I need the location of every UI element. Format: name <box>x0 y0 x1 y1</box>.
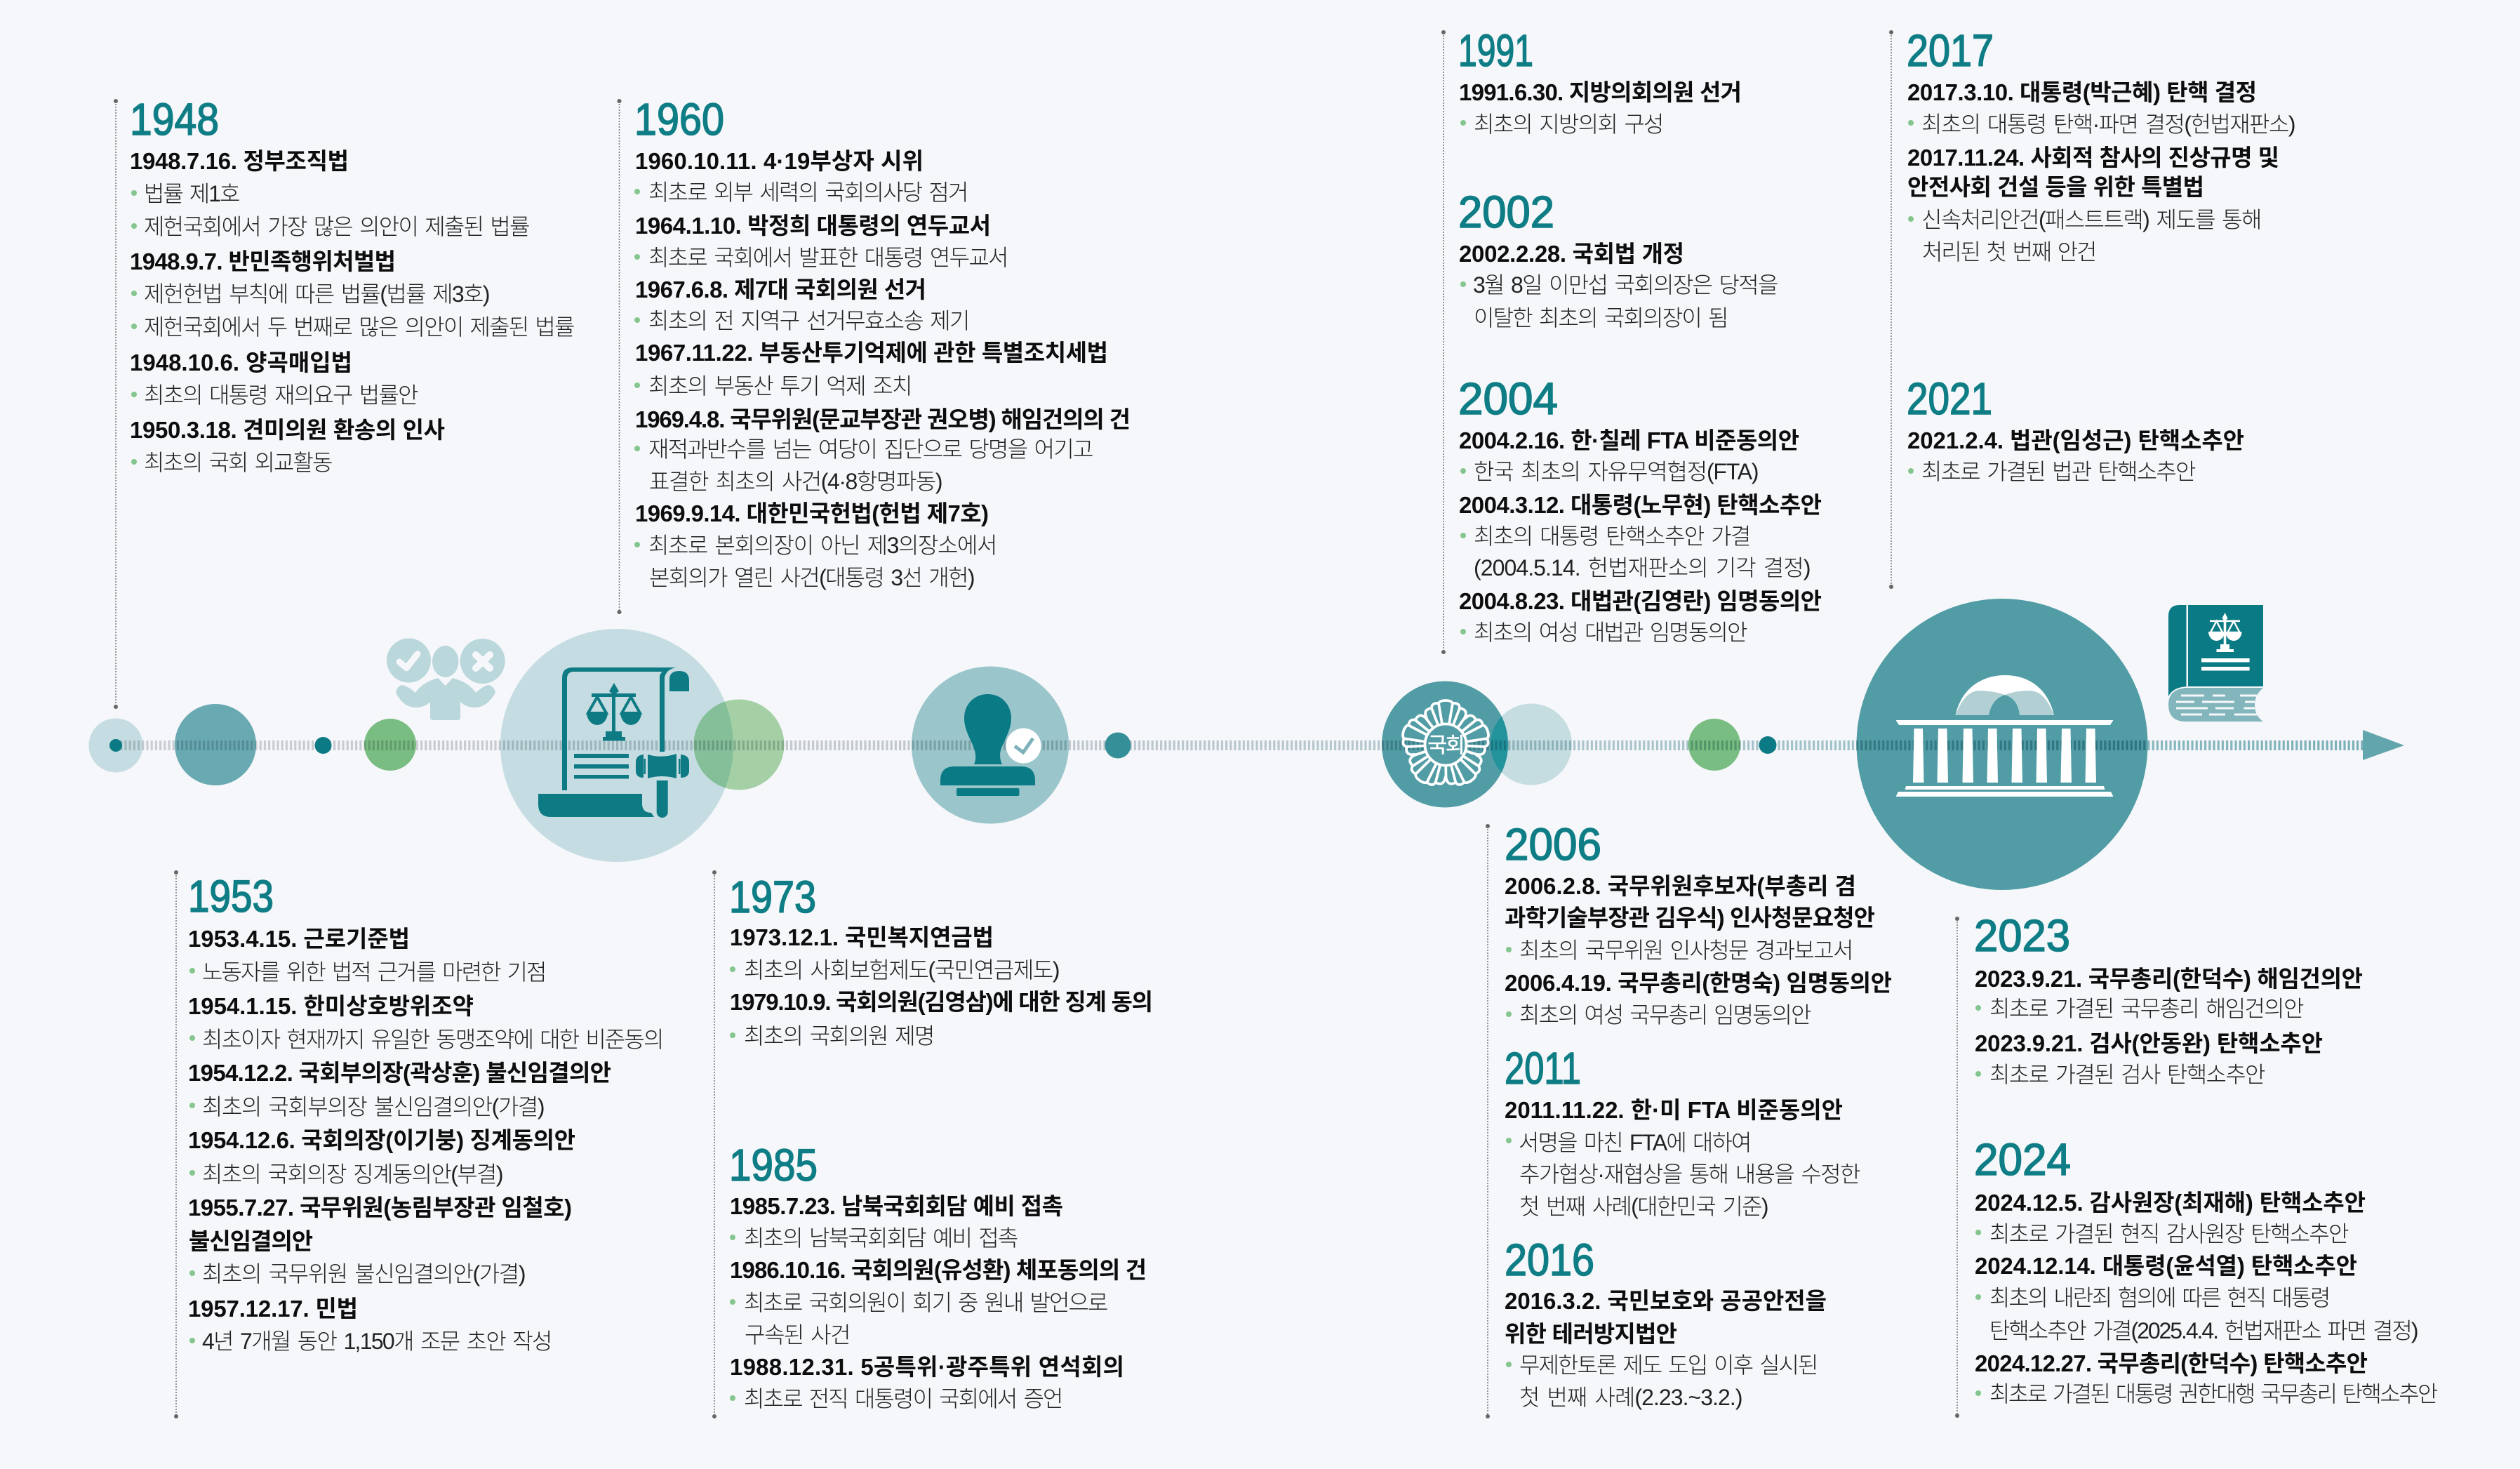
entry: 1969.9.14: 1969.9.14. 대한민국헌법(헌법 제7호) <box>635 500 988 526</box>
entry: 2002.2.28: 2002.2.28. 국회법 개정 <box>1459 241 1684 267</box>
entry: 1986.10.16 <box>730 1257 1146 1348</box>
panel: 1960 <box>618 94 1130 614</box>
entry: 2011.11.22: 2011.11.22. 한·미 FTA 비준동의안 <box>1505 1097 1843 1123</box>
entry: 2002.2.28 <box>1459 241 1778 331</box>
year heading: 2006 <box>1505 819 1601 870</box>
entry: 2023.9.21 탄핵소추안: 최초로 가결된 검사 탄핵소추안 <box>1989 1062 2265 1087</box>
entry: 2006.2.8: 2006.2.8. 국무위원후보자(부총리 겸 <box>1505 873 1855 899</box>
year heading: 2016 <box>1505 1235 1594 1285</box>
icon: stamp with check <box>940 694 1041 796</box>
entry: 1969.4.8: 1969.4.8. 국무위원(문교부장관 권오병) 해임건의의 건 <box>635 406 1130 432</box>
entry: 2004.2.16: 한국 최초의 자유무역협정(FTA) <box>1474 459 1758 484</box>
entry: 1955.7.27: 최초의 국무위원 불신임결의안(가결) <box>202 1261 525 1287</box>
connector line <box>1955 917 1959 1418</box>
year heading: 1948 <box>130 94 219 145</box>
connector line <box>618 99 622 614</box>
icon: law document and gavel <box>538 667 689 818</box>
year heading: 2017 <box>1907 25 1994 76</box>
entry: 2023.9.21 해임건의안 <box>1975 966 2363 1021</box>
entry: 2004.2.16: 2004.2.16. 한·칠레 FTA 비준동의안 <box>1459 427 1799 453</box>
year heading: 2024 <box>1974 1134 2071 1185</box>
entry: 2006.4.19: 최초의 여성 국무총리 임명동의안 <box>1519 1002 1811 1028</box>
entry: 1955.7.27: 불신임결의안 <box>189 1228 313 1254</box>
icon: person weighing check and cross <box>387 639 505 720</box>
year heading: 2004 <box>1458 373 1558 424</box>
entry: 2024.12.5 <box>1975 1190 2366 1247</box>
entry: 1955.7.27 <box>188 1195 571 1287</box>
year heading: 2021 <box>1907 373 1992 424</box>
entry: 1973.12.1: 최초의 사회보험제도(국민연금제도) <box>744 957 1059 983</box>
entry: 1953.4.15: 1953.4.15. 근로기준법 <box>188 926 409 952</box>
entry: 1954.12.6 <box>188 1127 575 1187</box>
icon: National Assembly emblem <box>1397 700 1494 792</box>
timeline band <box>116 740 2364 750</box>
entry: 2011.11.22 <box>1505 1097 1860 1219</box>
entry: 2024.12.14: 탄핵소추안 가결(2025.4.4. 헌법재판소 파면 결정) <box>1989 1318 2418 1343</box>
connector line <box>174 870 178 1418</box>
entry: 2017.11.24: 안전사회 건설 등을 위한 특별법 <box>1907 174 2204 200</box>
entry: 1957.12.17: 1957.12.17. 민법 <box>188 1296 357 1322</box>
entry: 2017.3.10: 최초의 대통령 탄핵·파면 결정(헌법재판소) <box>1921 112 2295 137</box>
year heading: 1953 <box>188 871 274 922</box>
entry: 2017.11.24: 신속처리안건(패스트트랙) 제도를 통해 <box>1921 207 2261 232</box>
entry: 1948.9.7: 제헌헌법 부칙에 따른 법률(법률 제3호) <box>144 281 489 307</box>
entry: 2024.12.14 <box>1975 1253 2418 1343</box>
panel: 2017, 2021 <box>1889 25 2295 589</box>
entry: 2024.12.27: 2024.12.27. 국무총리(한덕수) 탄핵소추안 <box>1975 1350 2368 1376</box>
year heading: 1960 <box>634 94 724 145</box>
icon: law book <box>2168 605 2263 722</box>
entry: 1988.12.31 <box>730 1354 1124 1411</box>
entry: 2011.11.22: 추가협상·재협상을 통해 내용을 수정한 <box>1519 1162 1860 1187</box>
year heading: 1985 <box>729 1140 818 1190</box>
entry: 2004.3.12: 최초의 대통령 탄핵소추안 가결 <box>1474 524 1750 549</box>
entry: 1960.10.11: 최초로 외부 세력의 국회의사당 점거 <box>648 180 968 205</box>
entry: 2021.2.4: 2021.2.4. 법관(임성근) 탄핵소추안 <box>1907 427 2244 453</box>
timeline circles <box>88 599 2147 890</box>
entry: 1953.4.15 <box>188 926 546 985</box>
entry: 1948.9.7 <box>130 248 574 340</box>
entry: 2023.9.21 탄핵소추안: 2023.9.21. 검사(안동완) 탄핵소추안 <box>1975 1030 2323 1056</box>
entry: 1969.9.14: 최초로 본회의장이 아닌 제3의장소에서 <box>648 533 996 558</box>
arrow <box>2363 730 2404 760</box>
entry: 1948.7.16: 법률 제1호 <box>144 181 239 206</box>
entry: 1964.1.10 <box>634 213 1008 270</box>
entry: 1948.7.16 <box>130 148 529 239</box>
entry: 1986.10.16: 1986.10.16. 국회의원(유성환) 체포동의의 건 <box>730 1257 1146 1283</box>
entry: 1964.1.10: 최초로 국회에서 발표한 대통령 연두교서 <box>648 245 1008 270</box>
entry: 1991.6.30 <box>1459 79 1741 137</box>
connector line <box>1889 30 1893 589</box>
entry: 2024.12.5: 2024.12.5. 감사원장(최재해) 탄핵소추안 <box>1975 1190 2366 1216</box>
panel: 1973 and 1985 <box>712 870 1152 1418</box>
entry: 2017.11.24: 처리된 첫 번째 안건 <box>1922 239 2096 265</box>
entry: 2024.12.14: 최초의 내란죄 혐의에 따른 현직 대통령 <box>1989 1285 2330 1310</box>
entry: 1969.4.8 <box>634 406 1130 494</box>
entry: 1986.10.16: 최초로 국회의원이 회기 중 원내 발언으로 <box>744 1290 1107 1315</box>
entry: 1948.9.7: 1948.9.7. 반민족행위처벌법 <box>130 248 395 274</box>
entry: 1969.4.8: 표결한 최초의 사건(4·8항명파동) <box>649 469 942 494</box>
entry: 1954.12.2: 최초의 국회부의장 불신임결의안(가결) <box>202 1094 544 1119</box>
entry: 2006.4.19 <box>1505 970 1892 1028</box>
entry: 1950.3.18: 최초의 국회 외교활동 <box>144 450 332 475</box>
entry: 1950.3.18 <box>130 417 445 475</box>
entry: 2017.11.24 <box>1907 145 2279 265</box>
entry: 1948.7.16: 1948.7.16. 정부조직법 <box>130 148 348 174</box>
entry: 1991.6.30: 1991.6.30. 지방의회의원 선거 <box>1459 79 1741 105</box>
panel: 2006, 2011, 2016 <box>1486 819 1892 1418</box>
entry: 1948.7.16: 제헌국회에서 가장 많은 의안이 제출된 법률 <box>144 214 529 239</box>
entry: 1964.1.10: 1964.1.10. 박정희 대통령의 연두교서 <box>635 213 990 239</box>
entry: 1979.10.9: 최초의 국회의원 제명 <box>744 1023 934 1049</box>
panel: 1991, 2002, 2004 <box>1441 25 1822 654</box>
entry: 2024.12.14: 2024.12.14. 대통령(윤석열) 탄핵소추안 <box>1975 1253 2357 1279</box>
year heading: 2011 <box>1505 1043 1581 1094</box>
entry: 2017.3.10 <box>1907 79 2295 137</box>
entry: 2006.2.8 <box>1505 873 1875 963</box>
entry: 1954.12.2 <box>188 1060 611 1119</box>
entry: 1988.12.31: 최초로 전직 대통령이 국회에서 증언 <box>744 1386 1062 1411</box>
panel: 2023, 2024 <box>1955 910 2438 1418</box>
icon: National Assembly emblem: 국회 <box>1427 734 1464 757</box>
entry: 1985.7.23: 최초의 남북국회회담 예비 접촉 <box>744 1225 1018 1251</box>
entry: 1967.6.8: 최초의 전 지역구 선거무효소송 제기 <box>648 308 969 333</box>
entry: 1948.10.6 <box>130 350 418 408</box>
connector line <box>114 99 118 709</box>
entry: 2024.12.27: 최초로 가결된 대통령 권한대행 국무총리 탄핵소추안 <box>1989 1381 2438 1407</box>
year heading: 1991 <box>1458 25 1533 76</box>
entry: 2017.11.24: 2017.11.24. 사회적 참사의 진상규명 및 <box>1907 145 2279 171</box>
entry: 1960.10.11 <box>634 148 968 205</box>
entry: 2002.2.28: 3월 8일 이만섭 국회의장은 당적을 <box>1473 272 1778 298</box>
entry: 2004.8.23 <box>1459 588 1822 645</box>
entry: 1979.10.9 <box>730 989 1152 1049</box>
entry: 2016.3.2: 첫 번째 사례(2.23.~3.2.) <box>1519 1385 1742 1410</box>
connector line <box>1486 824 1490 1418</box>
entry: 2011.11.22: 서명을 마친 FTA에 대하여 <box>1519 1130 1751 1155</box>
icon: National Assembly building <box>1896 675 2114 797</box>
entry: 1969.9.14: 본회의가 열린 사건(대통령 3선 개헌) <box>649 565 974 590</box>
entry: 1979.10.9: 1979.10.9. 국회의원(김영삼)에 대한 징계 동의 <box>730 989 1152 1015</box>
year heading: 2023 <box>1974 910 2070 961</box>
entry: 1948.9.7: 제헌국회에서 두 번째로 많은 의안이 제출된 법률 <box>144 314 574 340</box>
entry: 1967.6.8: 1967.6.8. 제7대 국회의원 선거 <box>635 277 926 303</box>
entry: 2023.9.21 해임건의안: 2023.9.21. 국무총리(한덕수) 해임건의안 <box>1975 966 2363 992</box>
entry: 2004.3.12: 2004.3.12. 대통령(노무현) 탄핵소추안 <box>1459 492 1822 518</box>
entry: 1973.12.1 <box>730 924 1059 983</box>
entry: 2024.12.5: 최초로 가결된 현직 감사원장 탄핵소추안 <box>1989 1221 2349 1247</box>
entry: 2016.3.2: 위한 테러방지법안 <box>1505 1321 1677 1347</box>
entry: 2006.2.8: 과학기술부장관 김우식) 인사청문요청안 <box>1505 905 1875 931</box>
timeline dots <box>109 733 1777 758</box>
entry: 2017.3.10: 2017.3.10. 대통령(박근혜) 탄핵 결정 <box>1907 79 2256 105</box>
entry: 1988.12.31: 1988.12.31. 5공특위·광주특위 연석회의 <box>730 1354 1124 1380</box>
entry: 1986.10.16: 구속된 사건 <box>745 1322 850 1348</box>
entry: 2016.3.2: 무제한토론 제도 도입 이후 실시된 <box>1519 1352 1818 1378</box>
entry: 2004.3.12: (2004.5.14. 헌법재판소의 기각 결정) <box>1474 555 1810 580</box>
year heading: 1973 <box>729 872 816 922</box>
entry: 1950.3.18: 1950.3.18. 견미의원 환송의 인사 <box>130 417 445 443</box>
entry: 1967.6.8 <box>634 277 969 333</box>
entry: 1969.4.8: 재적과반수를 넘는 여당이 집단으로 당명을 어기고 <box>648 437 1093 462</box>
entry: 1985.7.23 <box>730 1193 1062 1251</box>
entry: 1967.11.22: 1967.11.22. 부동산투기억제에 관한 특별조치세법 <box>635 340 1107 366</box>
entry: 1957.12.17 <box>188 1296 552 1354</box>
entry: 1954.12.6: 최초의 국회의장 징계동의안(부결) <box>202 1162 502 1187</box>
entry: 2016.3.2 <box>1505 1288 1826 1410</box>
entry: 1954.1.15: 1954.1.15. 한미상호방위조약 <box>188 993 474 1019</box>
entry: 1967.11.22 <box>634 340 1107 399</box>
entry: 2023.9.21 탄핵소추안 <box>1975 1030 2323 1087</box>
entry: 1969.9.14 <box>634 500 996 590</box>
entry: 2016.3.2: 2016.3.2. 국민보호와 공공안전을 <box>1505 1288 1826 1314</box>
panel: 1948 <box>114 94 574 709</box>
connector line <box>1441 30 1446 654</box>
entry: 2004.2.16 <box>1459 427 1799 484</box>
entry: 1957.12.17: 4년 7개월 동안 1,150개 조문 초안 작성 <box>202 1329 552 1354</box>
entry: 2006.2.8: 최초의 국무위원 인사청문 경과보고서 <box>1519 938 1853 963</box>
entry: 2021.2.4 <box>1907 427 2244 484</box>
entry: 1973.12.1: 1973.12.1. 국민복지연금법 <box>730 924 993 950</box>
connector line <box>712 870 716 1418</box>
entry: 1953.4.15: 노동자를 위한 법적 근거를 마련한 기점 <box>202 959 546 985</box>
entry: 2002.2.28: 이탈한 최초의 국회의장이 됨 <box>1474 305 1728 331</box>
entry: 2004.8.23: 최초의 여성 대법관 임명동의안 <box>1474 620 1747 645</box>
year heading: 2002 <box>1458 187 1554 237</box>
entry: 2011.11.22: 첫 번째 사례(대한민국 기준) <box>1519 1194 1768 1219</box>
entry: 2004.8.23: 2004.8.23. 대법관(김영란) 임명동의안 <box>1459 588 1822 614</box>
entry: 2023.9.21 해임건의안: 최초로 가결된 국무총리 해임건의안 <box>1989 996 2304 1021</box>
entry: 1991.6.30: 최초의 지방의회 구성 <box>1474 112 1663 137</box>
entry: 2006.4.19: 2006.4.19. 국무총리(한명숙) 임명동의안 <box>1505 970 1892 996</box>
entry: 1948.10.6: 최초의 대통령 재의요구 법률안 <box>144 383 418 408</box>
panel: 1953 <box>174 870 663 1418</box>
entry: 1954.1.15 <box>188 993 663 1052</box>
entry: 1954.12.2: 1954.12.2. 국회부의장(곽상훈) 불신임결의안 <box>188 1060 611 1086</box>
entry: 1954.1.15: 최초이자 현재까지 유일한 동맹조약에 대한 비준동의 <box>202 1027 663 1052</box>
entry: 1960.10.11: 1960.10.11. 4·19부상자 시위 <box>635 148 923 174</box>
entry: 1948.10.6: 1948.10.6. 양곡매입법 <box>130 350 352 375</box>
entry: 2024.12.27 <box>1975 1350 2438 1407</box>
entry: 2021.2.4: 최초로 가결된 법관 탄핵소추안 <box>1921 459 2196 484</box>
entry: 1985.7.23: 1985.7.23. 남북국회회담 예비 접촉 <box>730 1193 1062 1219</box>
entry: 1954.12.6: 1954.12.6. 국회의장(이기붕) 징계동의안 <box>188 1127 575 1153</box>
entry: 2004.3.12 <box>1459 492 1822 580</box>
entry: 1967.11.22: 최초의 부동산 투기 억제 조치 <box>648 373 912 399</box>
entry: 1955.7.27: 1955.7.27. 국무위원(농림부장관 임철호) <box>188 1195 571 1221</box>
